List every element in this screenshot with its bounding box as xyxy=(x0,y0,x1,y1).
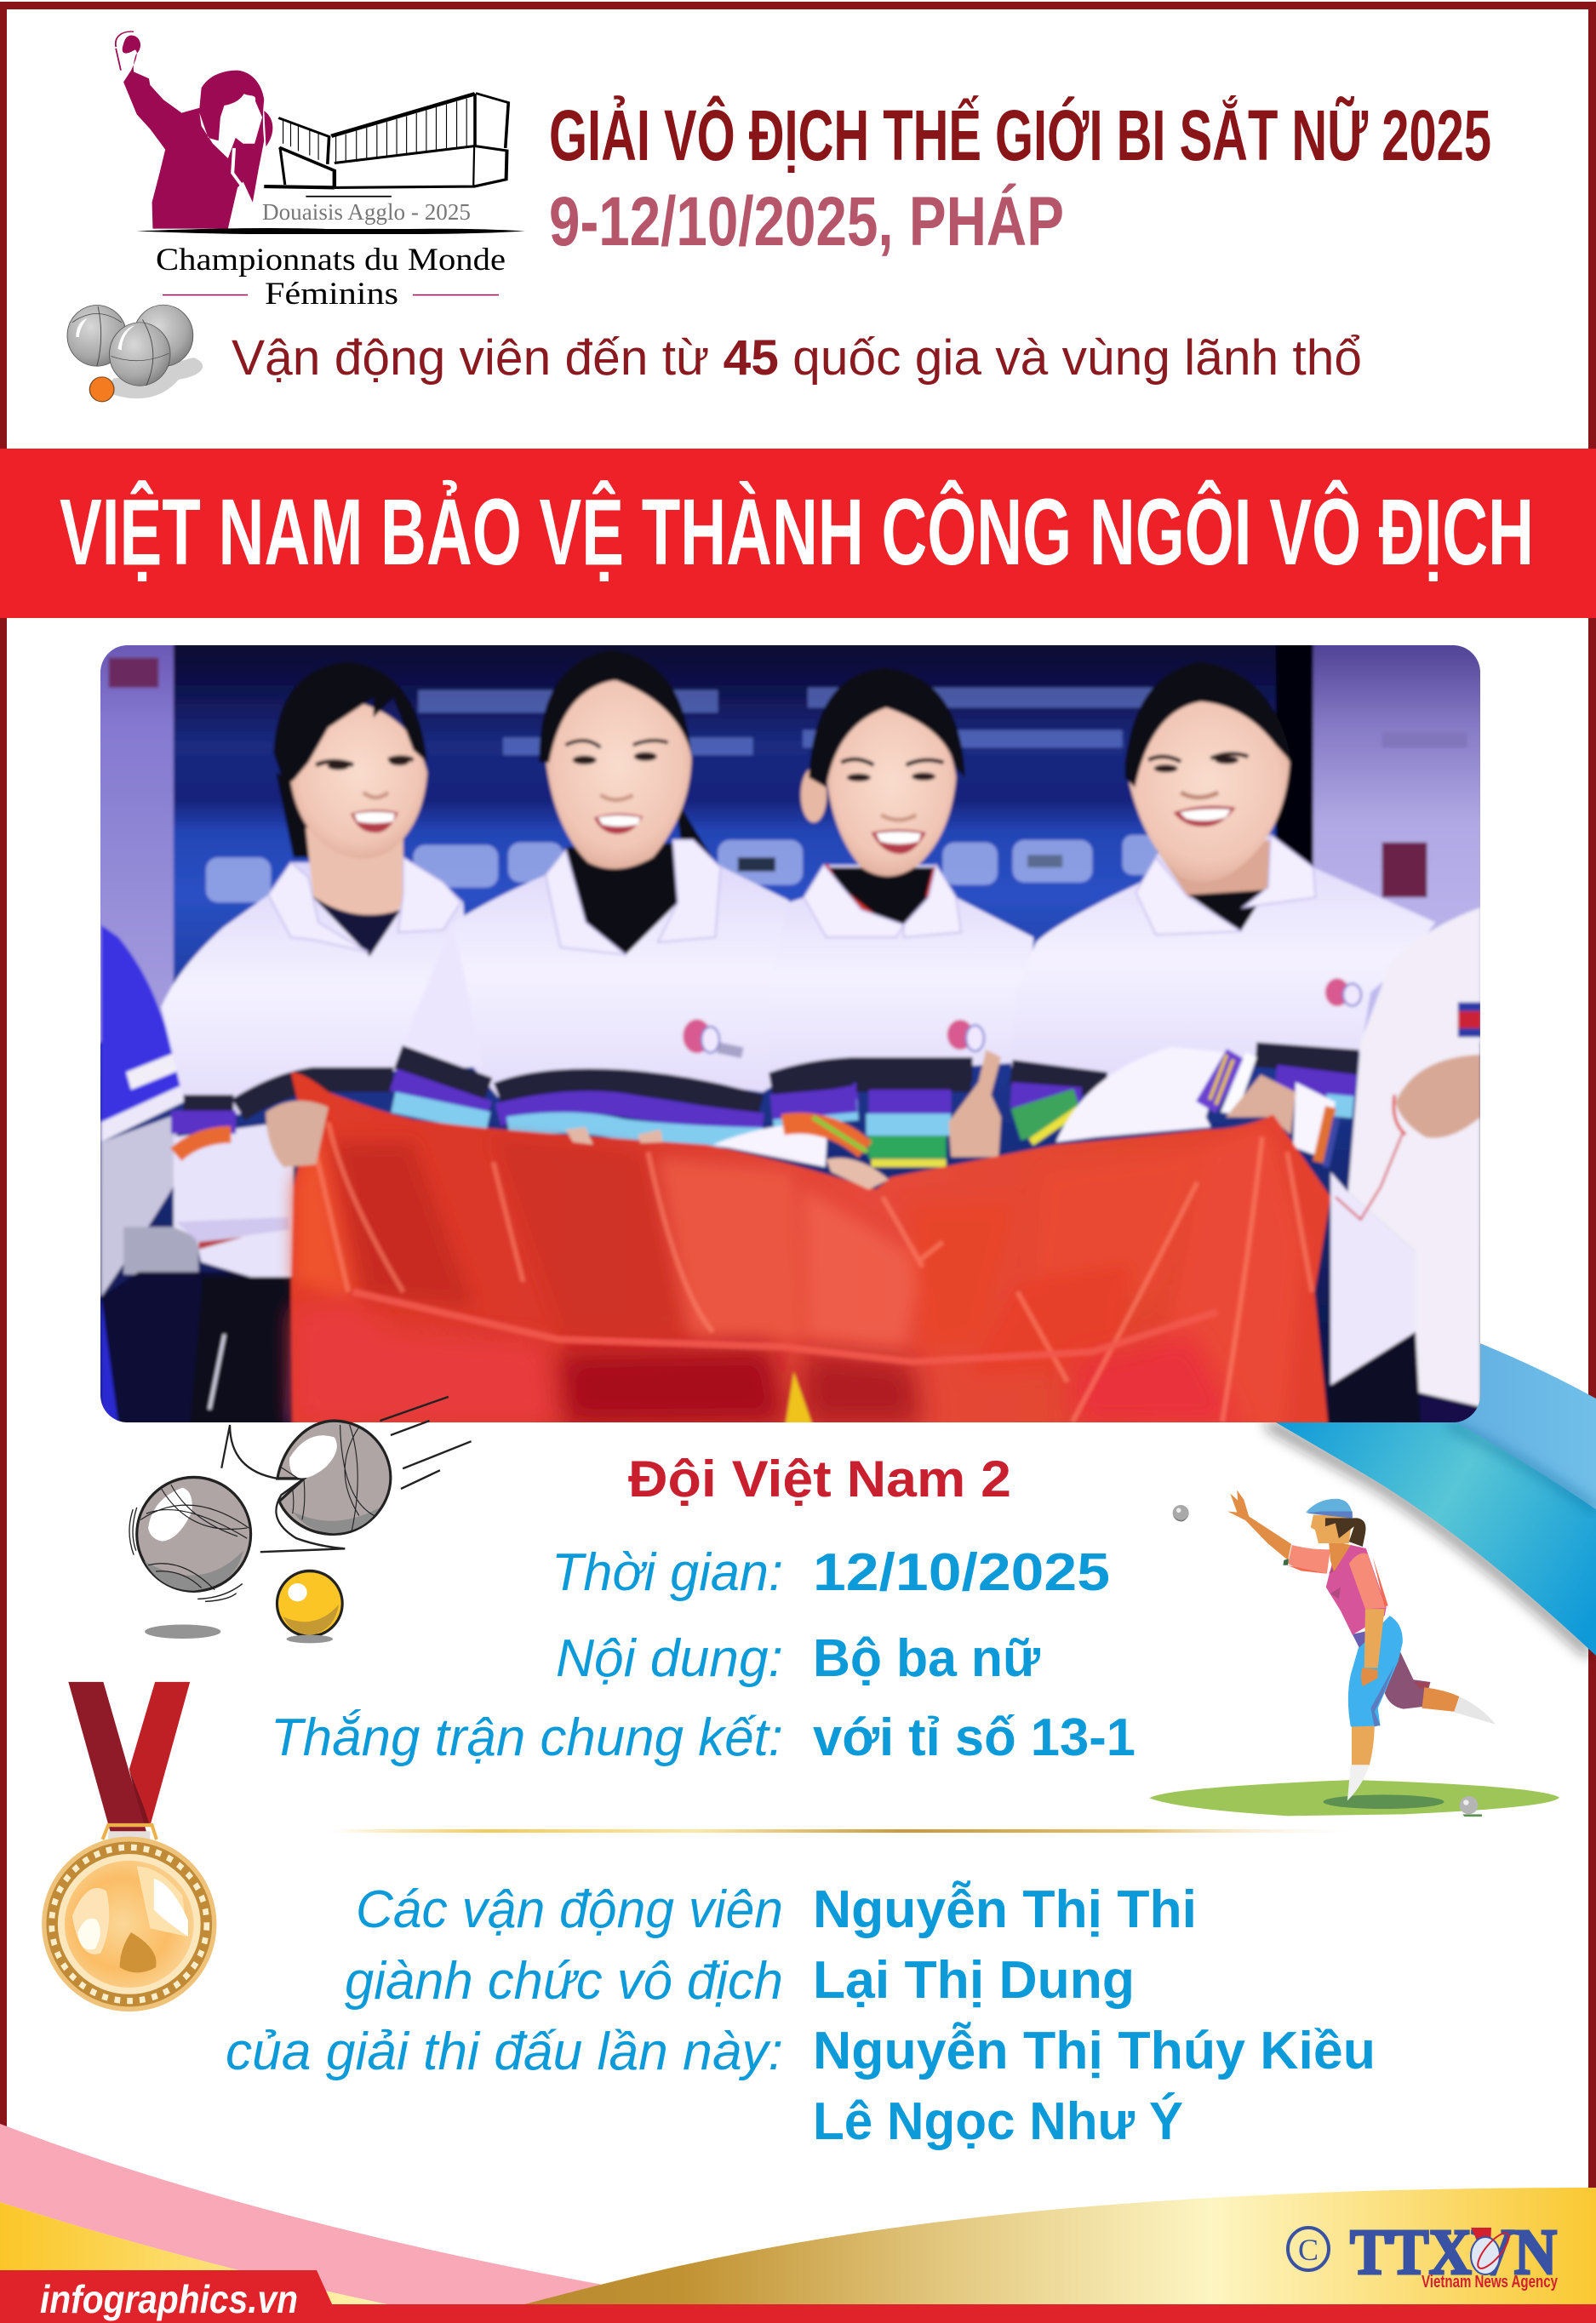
athletes caption line 2: giành chức vô địch xyxy=(345,1952,783,2011)
flag xyxy=(291,1073,1330,1426)
value: score: với tỉ số 13-1 xyxy=(813,1708,1136,1767)
team photo xyxy=(94,643,1492,1426)
hair xyxy=(1325,1518,1365,1547)
athlete four xyxy=(1011,661,1435,1082)
head xyxy=(546,680,691,869)
front leg xyxy=(1352,1725,1375,1765)
ball left xyxy=(137,1477,251,1591)
ball on ground xyxy=(1460,1796,1482,1817)
hands on flag xyxy=(266,1101,889,1189)
jack ball xyxy=(277,1571,342,1636)
white sleeves and cuffs xyxy=(713,1047,1336,1167)
value: date: 12/10/2025 xyxy=(813,1543,1110,1602)
illustration: bouncing petanque balls xyxy=(129,1397,472,1643)
logo caption: Féminins: Féminins xyxy=(265,277,398,312)
agency logo xyxy=(1288,2217,1559,2292)
copyright mark xyxy=(1288,2228,1329,2270)
red V and globe xyxy=(1471,2228,1513,2274)
header: event logo xyxy=(116,31,525,312)
shirt xyxy=(161,862,473,1114)
shirt xyxy=(453,848,808,1097)
logo: woman player and building xyxy=(116,31,508,229)
cap xyxy=(1306,1499,1353,1519)
athlete name 2: Lại Thị Dung xyxy=(813,1951,1135,2010)
copyright mark: C xyxy=(1298,2233,1319,2267)
logo caption: Championnats du Monde: Championnats du Monde xyxy=(156,243,506,278)
athlete three xyxy=(766,667,1033,1087)
label: time: Thời gian: xyxy=(552,1543,783,1602)
source tab xyxy=(0,2270,340,2323)
ball right xyxy=(277,1421,391,1534)
blue ribbon xyxy=(1260,1311,1596,1656)
athlete name 3: Nguyễn Thị Thúy Kiều xyxy=(813,2022,1376,2080)
jacket stripes xyxy=(171,1057,973,1154)
icon: petanque balls xyxy=(67,305,203,402)
turtleneck xyxy=(565,843,688,955)
participants line: Vận động viên đến từ 45 quốc gia và vùng lãnh thổ xyxy=(232,330,1362,386)
label: event: Nội dung: xyxy=(556,1629,783,1688)
near arm xyxy=(1349,1553,1386,1609)
footer decoration xyxy=(0,2124,1596,2323)
icon: gold medal xyxy=(42,1682,216,2011)
neighbouring athlete left xyxy=(101,924,294,1426)
athletes block xyxy=(226,1880,1376,2151)
head xyxy=(291,702,427,859)
illustration: woman throwing petanque ball xyxy=(1149,1490,1559,1817)
athletes caption line 3: của giải thi đấu lần này: xyxy=(226,2023,783,2081)
neck and head xyxy=(1329,1540,1351,1572)
thumbs up hand xyxy=(948,1050,1001,1157)
logo caption: Douaisis Agglo: Douaisis Agglo - 2025 xyxy=(262,199,471,225)
agency letters: TTXVN xyxy=(1350,2217,1557,2288)
logo ground line xyxy=(136,228,525,234)
athlete one xyxy=(161,661,473,1426)
right neighbouring athlete xyxy=(1328,907,1482,1426)
back leg xyxy=(1385,1651,1430,1709)
flying ball xyxy=(1173,1505,1189,1522)
hair tail xyxy=(276,773,313,857)
neck xyxy=(302,826,407,918)
photo background xyxy=(94,643,1492,1426)
event date and place: 9-12/10/2025, PHÁP xyxy=(549,183,1064,260)
collar xyxy=(268,857,460,953)
label: final: Thắng trận chung kết: xyxy=(271,1708,783,1767)
athlete name 4: Lê Ngọc Như Ý xyxy=(813,2092,1183,2151)
torso xyxy=(1326,1545,1387,1635)
details block xyxy=(271,1543,1136,1767)
source url: infographics.vn xyxy=(40,2277,298,2321)
shorts xyxy=(1348,1616,1403,1727)
flag star tip xyxy=(786,1372,813,1426)
raised arm xyxy=(1227,1490,1291,1560)
headline banner xyxy=(0,449,1596,618)
value: event: Bộ ba nữ xyxy=(813,1629,1040,1688)
team heading: Đội Việt Nam 2 xyxy=(628,1450,1011,1508)
athletes caption line 1: Các vận động viên xyxy=(356,1880,783,1939)
gold divider xyxy=(332,1829,1370,1833)
athlete two xyxy=(403,650,808,1097)
ground xyxy=(1149,1780,1559,1816)
hair tail xyxy=(676,808,712,858)
athlete name 1: Nguyễn Thị Thi xyxy=(813,1880,1197,1939)
logo side rules xyxy=(163,295,499,296)
shirt logos xyxy=(683,978,1361,1058)
athlete three and four xyxy=(766,661,1482,1426)
collar xyxy=(546,840,720,955)
